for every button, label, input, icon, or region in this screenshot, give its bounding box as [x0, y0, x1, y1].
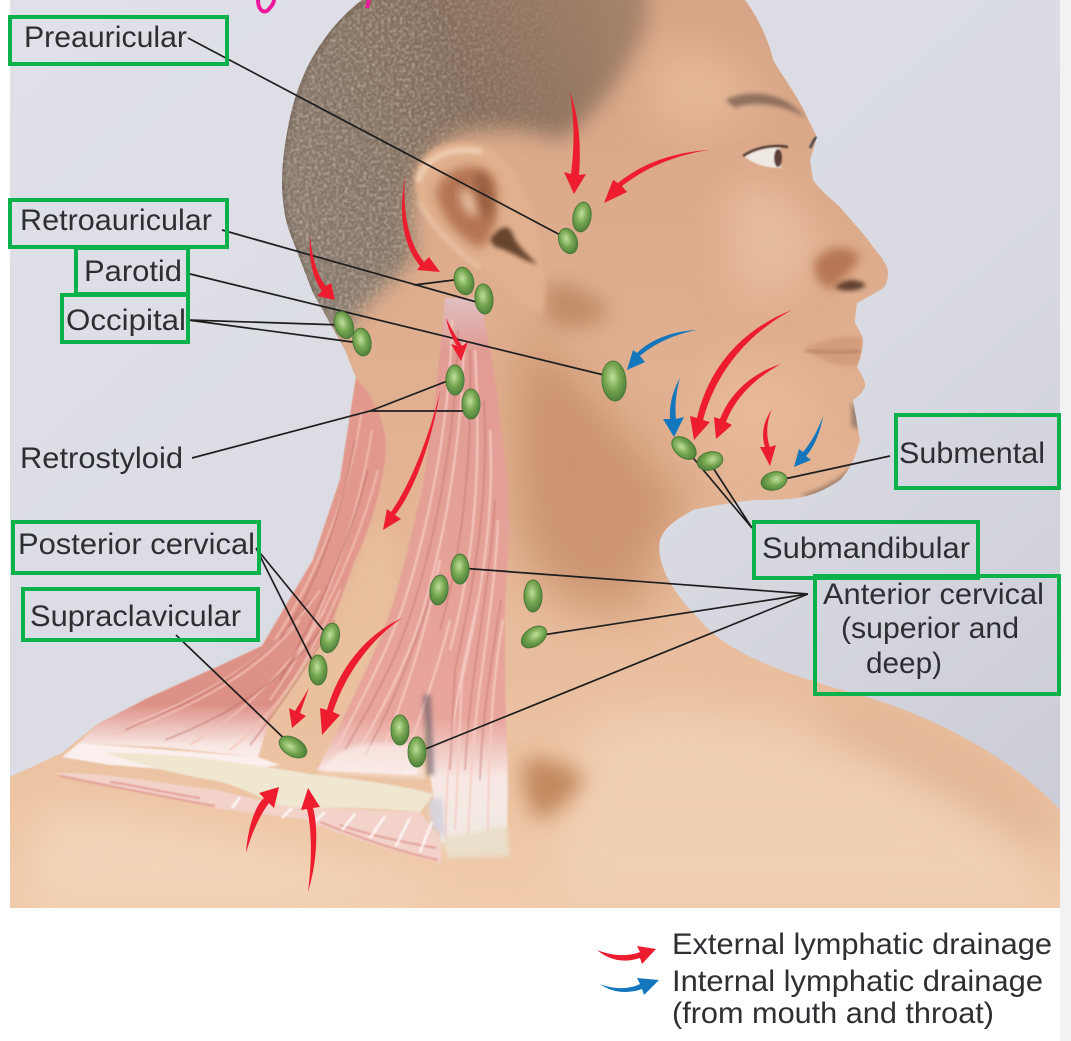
beard: [851, 402, 858, 430]
leader lines: [176, 38, 890, 752]
label: Anterior cervical (superior and deep): [815, 576, 1059, 694]
clavicle tendon band: [105, 753, 434, 812]
shading on head and neck: [515, 330, 690, 612]
label: Preauricular: Preauricular: [24, 21, 187, 54]
label: Supraclavicular: [23, 589, 258, 640]
gap shadow between muscle heads: [423, 695, 434, 775]
white fascia: [62, 743, 280, 775]
label: Posterior cervical: [13, 522, 259, 573]
label: Anterior cervical (superior and deep): deep): [866, 647, 942, 680]
shadow in front of ear: [545, 284, 610, 327]
eyebrow: [725, 94, 806, 118]
label: Posterior cervical: Posterior cervical: [18, 528, 255, 561]
collarbone shadow: [523, 759, 585, 820]
label: Submental: [896, 415, 1059, 488]
lips: [805, 337, 862, 366]
label: Parotid: Parotid: [84, 255, 182, 288]
label: Submandibular: Submandibular: [762, 532, 970, 565]
legend: External lymphatic drainage: [672, 928, 1052, 961]
sternocleidomastoid: [317, 298, 509, 843]
legend: [597, 928, 1052, 1030]
label: Retroauricular: Retroauricular: [20, 204, 212, 237]
label: Occipital: [62, 295, 188, 342]
label: Anterior cervical (superior and deep): Anterior cervical: [823, 578, 1044, 611]
label: Submandibular: [754, 522, 978, 578]
label: Parotid: [76, 248, 188, 294]
lower clavicular muscle: [55, 773, 441, 863]
label: Anterior cervical (superior and deep): (superior and: [841, 612, 1019, 645]
icon: red arrow: [597, 946, 656, 964]
eye: [743, 137, 817, 168]
illustration: exposed neck muscles: [55, 298, 510, 863]
label: Occipital: Occipital: [66, 304, 186, 337]
hair: [282, 0, 656, 346]
icon: blue arrow: [600, 978, 659, 995]
label: Preauricular: [10, 17, 227, 64]
label: Submental: Submental: [899, 437, 1045, 470]
red drainage arrows: [246, 92, 792, 892]
blue drainage arrows: [627, 330, 823, 467]
label: Retrostyloid: Retrostyloid: [20, 442, 183, 475]
ear: [415, 142, 545, 315]
nose shade: [814, 248, 860, 290]
tendon base: [441, 826, 510, 858]
fan base white: [320, 743, 425, 778]
lymph nodes: [276, 201, 789, 767]
legend: (from mouth and throat): [672, 997, 994, 1030]
magenta pen marks at top: [258, 0, 369, 12]
label: Supraclavicular: Supraclavicular: [30, 600, 241, 633]
label: Retroauricular: [10, 200, 227, 247]
shoulder-line shadow: [844, 714, 1052, 844]
legend: Internal lymphatic drainage: [672, 965, 1043, 998]
trapezius: [79, 378, 386, 757]
